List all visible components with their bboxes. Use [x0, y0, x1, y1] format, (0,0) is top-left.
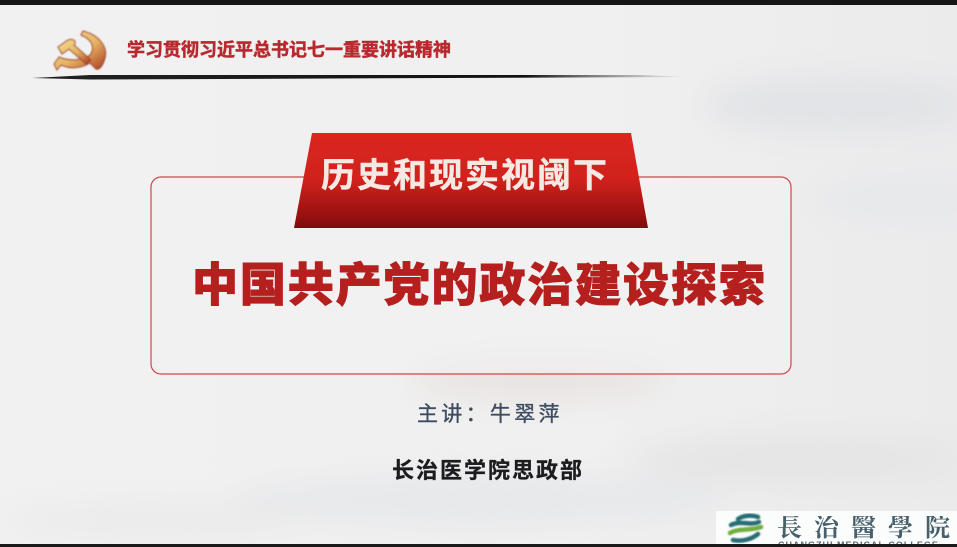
banner heading: 历史和现实视阈下 [321, 157, 609, 195]
main title: 中国共产党的政治建设探索 [192, 259, 767, 311]
header text: 学习贯彻习近平总书记七一重要讲话精神 [127, 40, 451, 60]
logo box [716, 511, 957, 544]
speaker: 主讲：牛翠萍 [417, 403, 563, 426]
header rule [32, 75, 690, 80]
top black bar [0, 0, 957, 5]
icon: college logo [730, 516, 761, 541]
icon: party emblem [54, 31, 106, 70]
ribbon banner [294, 133, 648, 228]
department: 长治医学院思政部 [392, 458, 584, 483]
rounded frame [151, 177, 791, 374]
bottom black bar [0, 544, 957, 547]
